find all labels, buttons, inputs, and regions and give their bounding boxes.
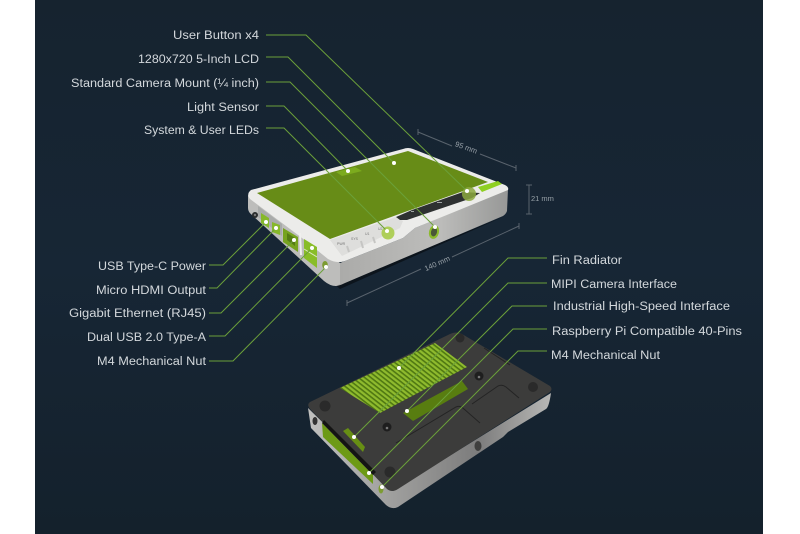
- green accent bar: [478, 181, 502, 192]
- labels: underside: Fin Radiator: [552, 255, 622, 267]
- HDMI port: [272, 222, 280, 235]
- labels: underside: [551, 255, 742, 362]
- dimension: 95 mm: 95 mm: [454, 139, 478, 156]
- labels: ports: Dual USB 2.0 Type-A: [87, 332, 206, 344]
- labels: ports: [69, 261, 207, 368]
- ports panel: [258, 206, 282, 236]
- labels: ports: Gigabit Ethernet (RJ45): [69, 308, 206, 320]
- grey side shell: [308, 393, 551, 508]
- dimension: 140 mm: [347, 223, 519, 306]
- led labels: [337, 227, 383, 246]
- labels: display side: System & User LEDs: [144, 125, 259, 137]
- nut: [322, 261, 328, 269]
- labels: ports: Micro HDMI Output: [96, 285, 207, 297]
- port separator: [300, 233, 301, 255]
- LED panel: [330, 217, 403, 256]
- device: top view: [248, 148, 508, 289]
- labels: underside: Raspberry Pi Compatible 40-Pins: [552, 326, 742, 338]
- RJ45 port: [283, 228, 298, 252]
- labels: underside: M4 Mechanical Nut: [551, 350, 661, 362]
- labels: ports: M4 Mechanical Nut: [97, 356, 207, 368]
- labels: underside: MIPI Camera Interface: [551, 279, 677, 291]
- labels: ports: USB Type-C Power: [98, 261, 206, 273]
- USB-C port: [261, 213, 269, 228]
- end panel dark gap: [322, 420, 376, 475]
- USB-A ports: [304, 239, 317, 268]
- labels: underside: Industrial High-Speed Interface: [553, 301, 730, 313]
- feet: [320, 334, 538, 478]
- power jack: [252, 212, 258, 218]
- device grey front side: [335, 189, 508, 286]
- callout dots: [264, 161, 469, 489]
- device white top shell: [248, 148, 508, 262]
- LCD screen: [257, 151, 488, 239]
- labels: display side: 1280x720 5-Inch LCD: [138, 54, 259, 66]
- camera mount: [427, 224, 441, 240]
- camera mount on side: [474, 441, 482, 451]
- screws: [382, 372, 484, 432]
- leader lines: [209, 35, 547, 487]
- led labels: PWR: [337, 242, 346, 246]
- MIPI interface connector: [403, 381, 468, 421]
- fin radiator: [340, 343, 467, 413]
- led labels: U2: [378, 227, 383, 231]
- dimension: 95 mm: [418, 129, 516, 171]
- industrial slot: [343, 428, 365, 452]
- user button glow: [462, 187, 476, 201]
- led labels: SYS: [351, 237, 359, 241]
- side green port: [322, 423, 373, 484]
- labels: display side: [71, 30, 260, 137]
- dimension: 140 mm: 140 mm: [423, 254, 451, 273]
- labels: display side: Light Sensor: [187, 102, 259, 114]
- led light guides: [347, 237, 375, 252]
- device: underside view: [308, 332, 552, 508]
- labels: display side: User Button x4: [173, 30, 260, 42]
- nut: [378, 484, 384, 494]
- end jack: [312, 417, 318, 425]
- button labels: [411, 202, 442, 212]
- light sensor window: [336, 167, 362, 176]
- dark base plate: [308, 332, 552, 491]
- dimension: 21 mm: 21 mm: [531, 194, 554, 203]
- user button strip: [396, 192, 480, 220]
- device left end face: [248, 195, 340, 286]
- led labels: U1: [365, 232, 370, 236]
- device shadow: [330, 216, 505, 289]
- labels: display side: Standard Camera Mount (¼ inch): [71, 78, 259, 90]
- light sensor glow: [382, 226, 394, 240]
- dimension: 21 mm: [526, 185, 554, 214]
- recess outlines: [396, 348, 519, 443]
